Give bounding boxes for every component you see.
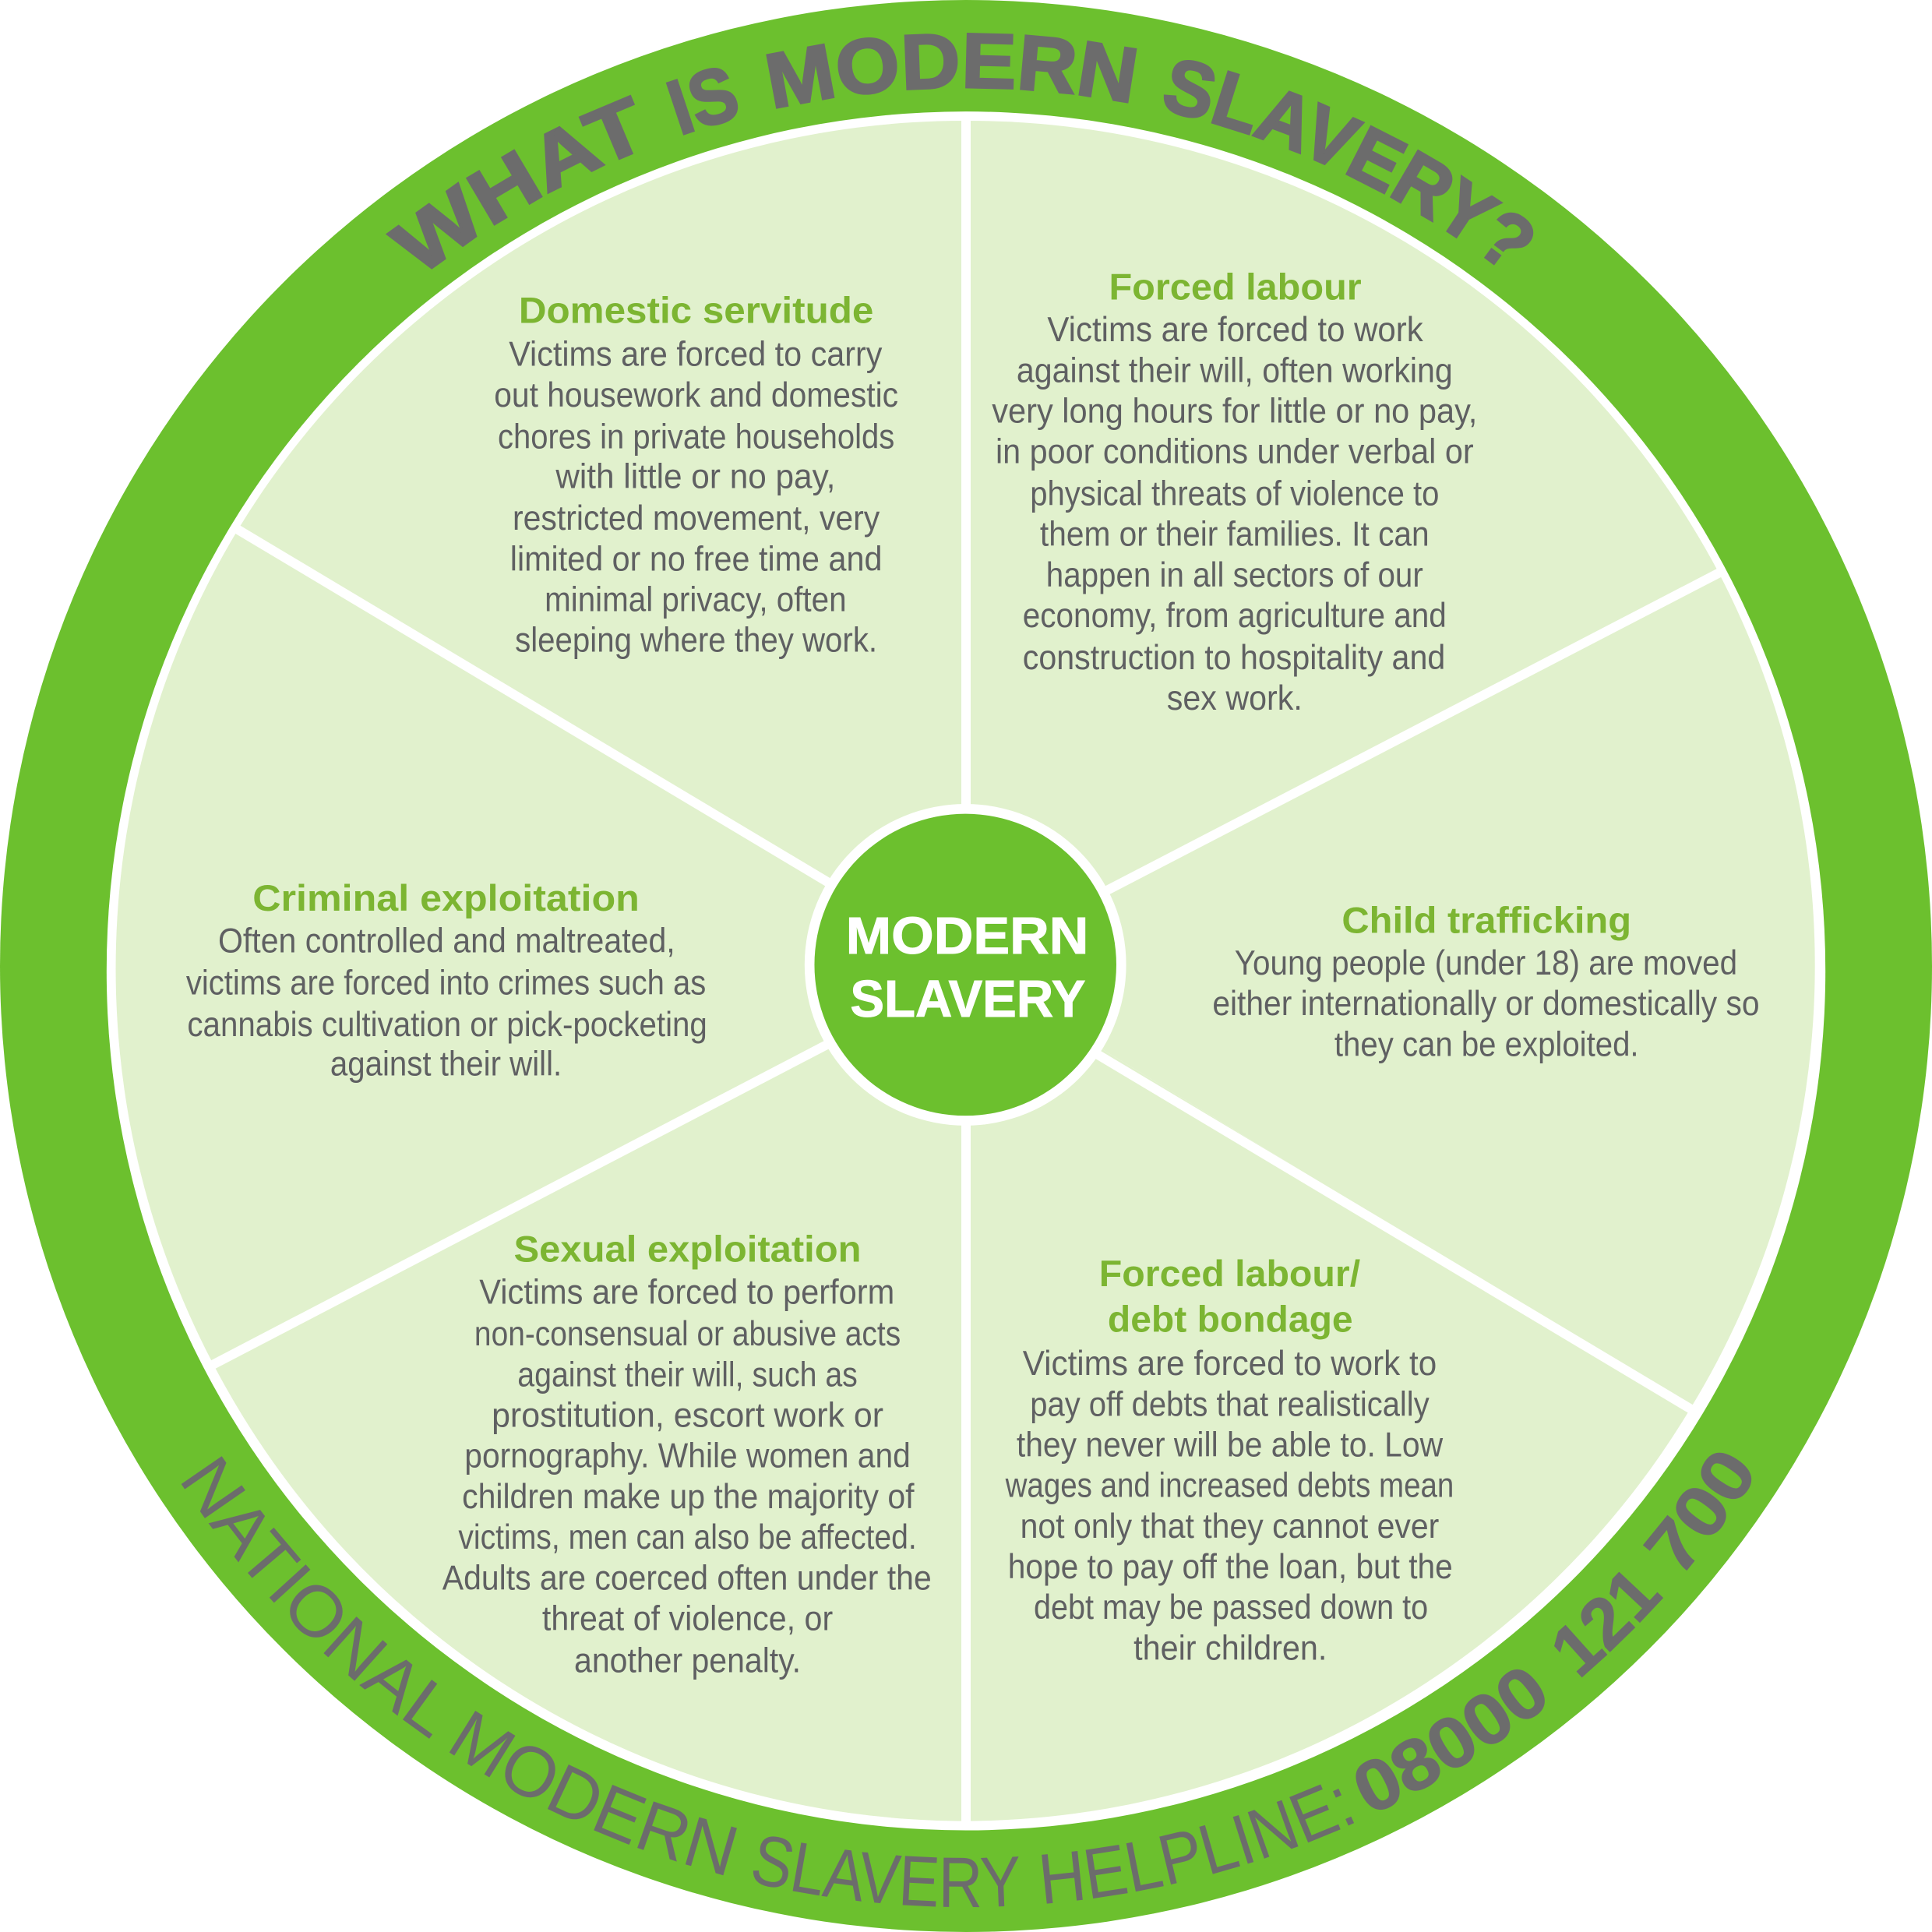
body text: domestic servitude: Victims are forced to carry — [509, 336, 883, 374]
body text: sexual exploitation: children make up the majority of — [462, 1478, 915, 1516]
body text: child trafficking — [1212, 944, 1760, 1063]
body text: forced labour: physical threats of violence to — [1030, 474, 1439, 513]
body text: debt bondage: debt may be passed down to — [1034, 1588, 1428, 1627]
panel: criminal exploitation — [116, 530, 966, 1364]
body text: forced labour: very long hours for little or no pay, — [992, 392, 1477, 430]
body text: forced labour: happen in all sectors of our — [1046, 556, 1423, 594]
heading: forced labour / debt bondage: Forced labour/ — [1099, 1253, 1360, 1295]
body text: forced labour: them or their families. It can — [1040, 516, 1430, 554]
body text: debt bondage: pay off debts that realistically — [1030, 1385, 1430, 1423]
panel: forced labour — [966, 121, 1719, 966]
heading: domestic servitude: Domestic servitude — [519, 290, 873, 331]
helpline banner: MODERN — [449, 1711, 737, 1876]
title: what is modern slavery: WHAT — [386, 95, 635, 270]
helpline banner: SLAVERY — [753, 1836, 1019, 1907]
panel: sexual exploitation — [213, 966, 966, 1821]
body text: debt bondage: wages and increased debts mean — [1005, 1467, 1454, 1505]
title: what is modern slavery: SLAVERY? — [1164, 60, 1533, 265]
body text: forced labour — [992, 311, 1477, 717]
panel: child trafficking — [966, 573, 1815, 1408]
body text: forced labour: construction to hospitality and — [1023, 639, 1445, 677]
body text: sexual exploitation: non-consensual or abusive acts — [474, 1315, 901, 1353]
body text: child trafficking: either internationally or domestically so — [1212, 985, 1760, 1023]
body text: debt bondage: their children. — [1133, 1629, 1327, 1667]
helpline banner: NATIONAL — [181, 1456, 438, 1739]
panel: domestic servitude — [238, 121, 966, 966]
body text: domestic servitude: restricted movement, very — [513, 499, 880, 538]
body text: sexual exploitation: another penalty. — [574, 1641, 801, 1680]
centre hub: modern slavery: MODERN — [846, 908, 1088, 965]
body text: debt bondage: hope to pay off the loan, but the — [1008, 1548, 1453, 1586]
body text: criminal exploitation: Often controlled and maltreated, — [218, 922, 675, 961]
body text: sexual exploitation — [442, 1273, 932, 1680]
body text: sexual exploitation: Adults are coerced often under the — [442, 1559, 932, 1597]
helpline banner — [181, 1452, 1751, 1907]
body text: debt bondage: not only that they cannot ever — [1021, 1507, 1439, 1546]
heading: criminal exploitation: Criminal exploitation — [252, 878, 640, 919]
title: what is modern slavery — [386, 33, 1533, 270]
body text: sexual exploitation: threat of violence, or — [542, 1599, 833, 1638]
helpline banner: 700 — [1643, 1452, 1751, 1571]
heading: forced labour / debt bondage: debt bondage — [1108, 1299, 1353, 1341]
body text: domestic servitude: sleeping where they work. — [515, 622, 877, 660]
body text: domestic servitude: limited or no free time and — [510, 540, 882, 578]
body text: debt bondage: they never will be able to. Low — [1017, 1426, 1444, 1464]
body text: criminal exploitation: victims are forced into crimes such as — [186, 964, 706, 1002]
heading: child trafficking: Child trafficking — [1341, 900, 1631, 941]
body text: sexual exploitation: pornography. While women and — [464, 1437, 911, 1475]
body text: sexual exploitation: Victims are forced to perform — [479, 1273, 894, 1311]
body text: sexual exploitation: prostitution, escort work or — [492, 1397, 883, 1435]
centre hub: modern slavery: SLAVERY — [850, 971, 1085, 1028]
body text: domestic servitude: out housework and domestic — [494, 376, 898, 414]
helpline banner: 121 — [1554, 1572, 1664, 1678]
body text: domestic servitude: with little or no pay, — [555, 457, 835, 495]
helpline banner: HELPLINE: — [1042, 1784, 1354, 1904]
body text: forced labour: against their will, often working — [1017, 351, 1453, 390]
body text: criminal exploitation: against their will. — [330, 1045, 562, 1084]
body text: sexual exploitation: victims, men can also be affected. — [458, 1518, 917, 1557]
body text: child trafficking: they can be exploited. — [1334, 1025, 1639, 1063]
body text: child trafficking: Young people (under 18) are moved — [1235, 944, 1737, 982]
panel: forced labour / debt bondage — [966, 966, 1690, 1821]
helpline banner: 08000 — [1356, 1669, 1545, 1810]
body text: forced labour: in poor conditions under verbal or — [996, 433, 1474, 471]
body text: debt bondage: Victims are forced to work to — [1023, 1345, 1437, 1383]
body text: sexual exploitation: against their will, such as — [517, 1356, 858, 1394]
body text: domestic servitude — [494, 336, 898, 660]
body text: forced labour: sex work. — [1167, 679, 1303, 717]
title: what is modern slavery: IS — [665, 68, 739, 136]
body text: domestic servitude: minimal privacy, often — [545, 580, 847, 619]
title: what is modern slavery: MODERN — [766, 33, 1137, 109]
body text: domestic servitude: chores in private households — [498, 418, 894, 457]
body text: criminal exploitation — [186, 922, 707, 1084]
body text: forced labour: economy, from agriculture and — [1023, 597, 1447, 635]
heading: forced labour / debt bondage — [1099, 1253, 1360, 1341]
heading: sexual exploitation: Sexual exploitation — [514, 1229, 862, 1271]
body text: debt bondage — [1005, 1345, 1454, 1667]
white inner disc — [107, 111, 1825, 1831]
body text: criminal exploitation: cannabis cultivation or pick-pocketing — [187, 1006, 707, 1044]
body text: forced labour: Victims are forced to work — [1047, 311, 1424, 349]
heading: forced labour: Forced labour — [1109, 266, 1362, 308]
centre hub: modern slavery — [805, 804, 1126, 1126]
